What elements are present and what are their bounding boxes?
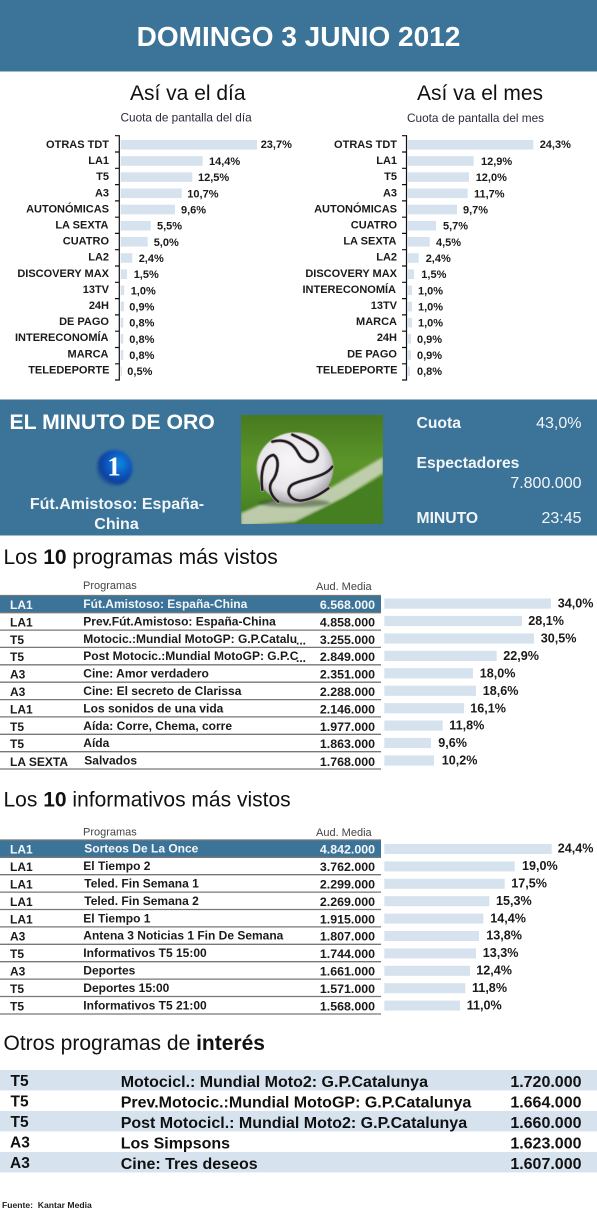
table: 10 programas más vistos: Prev.Fút.Amistoso: España-China <box>83 614 276 628</box>
table: 10 informativos más vistos: 1.744.000 <box>320 947 375 961</box>
bar chart: día: LA1 <box>88 155 109 167</box>
table column headers <box>83 826 373 839</box>
heading: otros programas: Otros programas de interés <box>4 1032 265 1055</box>
bar chart: programas: 30,5% <box>541 632 576 646</box>
bar chart: día: LA SEXTA <box>55 220 109 232</box>
bar chart: programas: 28,1% <box>528 614 564 628</box>
bar chart: programas: 11,8% <box>449 719 484 733</box>
stat: cuota: Cuota <box>416 415 461 432</box>
bar chart: día: 0,8% <box>129 318 155 330</box>
programme name: China <box>94 516 139 533</box>
bar chart: mes: 24H <box>377 332 397 344</box>
table: 10 programas más vistos: 2.146.000 <box>320 702 375 716</box>
row 1 highlighted: 6.568.000 <box>320 598 375 612</box>
table: 10 informativos más vistos: 1.661.000 <box>320 964 375 978</box>
bar chart: programas: 34,0% <box>558 597 593 611</box>
bar chart: mes: AUTONÓMICAS <box>314 202 397 215</box>
bar chart: mes: 1,0% <box>418 318 443 330</box>
bar chart: mes: CUATRO <box>351 220 397 232</box>
table: 10 informativos más vistos: LA1 <box>10 912 33 926</box>
stat: minuto <box>416 510 582 527</box>
bar chart: mes: MARCA <box>356 316 397 328</box>
bar chart: mes: OTRAS TDT <box>334 139 397 151</box>
bar chart: día: INTERECONOMÍA <box>15 331 109 344</box>
table: 10 programas más vistos: ... <box>296 634 306 648</box>
bar chart: mes: 13TV <box>371 300 398 312</box>
table column headers: Programas <box>83 826 137 838</box>
bar chart: día: 5,5% <box>157 221 182 233</box>
table: 10 programas más vistos: 4.858.000 <box>320 615 375 629</box>
bar chart: mes: 12,0% <box>476 172 507 184</box>
table: otros programas de interés <box>0 1070 597 1173</box>
table: 10 programas más vistos <box>0 580 381 769</box>
bar chart: programas: 18,0% <box>480 666 515 680</box>
row: Prev.Motocic.:Mundial MotoGP: G.P.Catalunya <box>121 1094 471 1112</box>
bar chart: mes: LA2 <box>376 252 397 264</box>
bar chart: día: 0,9% <box>129 302 155 314</box>
table: 10 programas más vistos: Salvados <box>84 754 137 768</box>
row <box>10 1073 582 1091</box>
bar chart: informativos: 11,0% <box>467 998 502 1012</box>
stat: cuota <box>416 415 582 432</box>
programme name: Fút.Amistoso: España- <box>30 496 204 513</box>
table: 10 programas más vistos: T5 <box>10 720 24 734</box>
table: 10 informativos más vistos: Teled. Fin Semana 1 <box>84 876 199 890</box>
bar chart: informativos: 14,4% <box>490 911 526 925</box>
bar chart: informativos: 13,3% <box>483 946 518 960</box>
bar chart: mes: 0,9% <box>417 334 442 346</box>
stat: espectadores <box>416 455 582 492</box>
bar chart: informativos: 17,5% <box>511 876 547 890</box>
table: 10 informativos más vistos: 1.915.000 <box>320 912 375 926</box>
row: A3 <box>10 1155 30 1172</box>
subtitle: cuota del mes: Cuota de pantalla del mes <box>407 111 544 125</box>
table: 10 informativos más vistos: Deportes <box>83 964 136 978</box>
table: 10 programas más vistos: Cine: Amor verdadero <box>83 667 209 681</box>
table: 10 programas más vistos: ... <box>296 651 306 665</box>
table: 10 informativos más vistos <box>0 826 381 1014</box>
table: 10 programas más vistos: LA1 <box>10 702 33 716</box>
bar chart: mes: 9,7% <box>463 204 488 216</box>
table: 10 programas más vistos: LA SEXTA <box>10 755 68 769</box>
bar chart: mes: 11,7% <box>474 188 505 200</box>
stat: minuto: 23:45 <box>541 510 582 527</box>
table: 10 programas más vistos: Los sonidos de una vida <box>83 701 224 715</box>
row 1 highlighted <box>10 842 375 857</box>
table: 10 informativos más vistos: 2.269.000 <box>320 895 375 909</box>
row 1 highlighted <box>10 597 375 612</box>
table: 10 informativos más vistos: 2.299.000 <box>320 878 375 892</box>
bar chart: informativos: 24,4% <box>558 842 593 856</box>
bar chart: día: 14,4% <box>209 156 240 168</box>
icon: la 1 logo: 1 <box>107 452 121 482</box>
table: 10 informativos más vistos: Informativos T5 15:00 <box>83 946 207 960</box>
bar chart: día: 23,7% <box>261 139 292 151</box>
table: 10 programas más vistos: Post Motocic.:Mundial MotoGP: G.P.C <box>83 649 299 663</box>
table: 10 programas más vistos: A3 <box>10 668 26 682</box>
table: 10 programas más vistos: 2.849.000 <box>320 650 375 664</box>
heading: el minuto de oro: EL MINUTO DE ORO <box>10 411 215 434</box>
axis month <box>402 136 406 380</box>
table: 10 informativos más vistos: 1.807.000 <box>320 930 375 944</box>
heading: así va el mes: Así va el mes <box>417 82 543 105</box>
bar chart: mes: 4,5% <box>436 237 461 249</box>
row 1 highlighted: LA1 <box>10 843 33 857</box>
row: 1.607.000 <box>510 1156 582 1173</box>
row: 1.664.000 <box>510 1094 582 1112</box>
icon: la 1 logo <box>96 450 132 486</box>
row <box>10 1094 582 1112</box>
row: Cine: Tres deseos <box>121 1156 258 1173</box>
table: 10 informativos más vistos: T5 <box>10 947 24 961</box>
table: 10 programas más vistos: 3.255.000 <box>320 633 375 647</box>
bar chart: día: CUATRO <box>63 236 109 248</box>
row: Los Simpsons <box>121 1136 230 1152</box>
table column headers: Programas <box>83 580 137 592</box>
table: 10 programas más vistos: LA1 <box>10 615 33 629</box>
table: 10 informativos más vistos: Antena 3 Noticias 1 Fin De Semana <box>83 929 284 943</box>
bar chart: día: 1,0% <box>131 285 156 297</box>
row: Motocicl.: Mundial Moto2: G.P.Catalunya <box>121 1074 428 1091</box>
header banner <box>0 0 597 72</box>
row <box>10 1155 582 1173</box>
table column headers: Aud. Media <box>316 827 373 839</box>
bar chart: día: 0,5% <box>127 366 153 378</box>
bar chart: mes: 24,3% <box>540 139 571 151</box>
bar chart: día: 12,5% <box>198 172 229 184</box>
table: 10 informativos más vistos: Teled. Fin Semana 2 <box>84 894 199 908</box>
row 1 highlighted: 4.842.000 <box>320 843 375 857</box>
bar chart: mes: INTERECONOMÍA <box>302 283 396 296</box>
bar chart: mes: DISCOVERY MAX <box>305 268 398 280</box>
panel: así va el mes <box>302 82 571 380</box>
bar chart: día: DISCOVERY MAX <box>17 268 110 280</box>
table: 10 programas más vistos: 2.351.000 <box>320 668 375 682</box>
heading: los 10 informativos: Los 10 informativos más vistos <box>4 789 291 812</box>
table: 10 informativos más vistos: El Tiempo 1 <box>83 911 151 925</box>
bar chart: día <box>15 139 292 378</box>
table: 10 programas más vistos: Cine: El secreto de Clarissa <box>83 684 242 698</box>
bar chart: día: T5 <box>96 171 109 183</box>
bar chart: mes <box>302 139 571 378</box>
table column headers <box>83 580 373 593</box>
heading: así va el día: Así va el día <box>130 82 246 105</box>
panel: así va el día <box>15 82 292 380</box>
panel: el minuto de oro <box>0 400 597 536</box>
row: 1.720.000 <box>510 1074 582 1091</box>
table: 10 programas más vistos: T5 <box>10 650 24 664</box>
title: DOMINGO 3 JUNIO 2012 <box>137 21 460 52</box>
bar chart: mes: TELEDEPORTE <box>316 364 398 376</box>
heading: los 10 programas: Los 10 programas más vistos <box>4 546 278 569</box>
row: Post Motocicl.: Mundial Moto2: G.P.Catalunya <box>121 1115 467 1132</box>
bar chart: informativos: 12,4% <box>476 964 512 978</box>
bar chart: informativos: 15,3% <box>496 894 532 908</box>
bar chart: mes: 12,9% <box>481 156 512 168</box>
table: 10 informativos más vistos: LA1 <box>10 860 33 874</box>
table: 10 programas más vistos: 1.863.000 <box>320 737 375 751</box>
table: 10 informativos más vistos: LA1 <box>10 895 33 909</box>
bar chart: programas: 22,9% <box>503 649 539 663</box>
bar chart: día: DE PAGO <box>59 316 109 328</box>
source note: Fuente: Kantar Media <box>2 1200 92 1210</box>
bar chart: día: TELEDEPORTE <box>28 364 110 376</box>
bar chart: programas: 9,6% <box>438 736 467 750</box>
bar chart: informativos <box>384 842 593 1012</box>
bar chart: programas: 10,2% <box>442 754 477 768</box>
bar chart: día: LA2 <box>88 252 109 264</box>
table: 10 informativos más vistos: Deportes 15:00 <box>83 981 170 995</box>
bar chart: día: 9,6% <box>181 204 206 216</box>
table: 10 programas más vistos: Motocic.:Mundial MotoGP: G.P.Catalu <box>83 632 297 646</box>
table: 10 programas más vistos: T5 <box>10 633 24 647</box>
table: 10 informativos más vistos: A3 <box>10 930 26 944</box>
bar chart: mes: 1,5% <box>421 269 447 281</box>
bar chart: día: 1,5% <box>134 269 159 281</box>
bar chart: mes: 1,0% <box>418 302 443 314</box>
table: 10 programas más vistos: 2.288.000 <box>320 685 375 699</box>
stat: minuto: MINUTO <box>416 510 478 527</box>
bar chart: día: 2,4% <box>139 253 164 265</box>
bar chart: día: 0,8% <box>129 350 155 362</box>
bar chart: informativos: 11,8% <box>472 981 507 995</box>
bar chart: día: 24H <box>89 300 109 312</box>
bar chart: mes: LA1 <box>376 155 397 167</box>
table: 10 programas más vistos: T5 <box>10 737 24 751</box>
bar chart: programas: 16,1% <box>470 701 506 715</box>
bar chart: mes: 0,9% <box>417 350 442 362</box>
table: 10 informativos más vistos: El Tiempo 2 <box>83 859 151 873</box>
bar chart: mes: 2,4% <box>426 253 451 265</box>
stat: espectadores: 7.800.000 <box>510 475 582 492</box>
table: 10 informativos más vistos: 1.568.000 <box>320 1000 375 1014</box>
row: 1.623.000 <box>510 1136 582 1152</box>
bar chart: día: 13TV <box>83 284 110 296</box>
bar chart: mes: DE PAGO <box>347 348 397 360</box>
bar chart: programas: 18,6% <box>483 684 518 698</box>
row: T5 <box>10 1073 29 1090</box>
bar chart: programas <box>384 597 593 768</box>
bar chart: mes: A3 <box>383 187 397 199</box>
bar chart: mes: 1,0% <box>418 285 443 297</box>
bar chart: informativos: 13,8% <box>486 929 522 943</box>
row 1 highlighted: Fút.Amistoso: España-China <box>83 597 248 611</box>
bar chart: día: 10,7% <box>187 188 219 200</box>
bar chart: mes: 0,8% <box>417 366 442 378</box>
bar chart: mes: 5,7% <box>443 221 468 233</box>
table: 10 informativos más vistos: LA1 <box>10 878 33 892</box>
table: 10 programas más vistos: 1.977.000 <box>320 720 375 734</box>
table: 10 programas más vistos: 1.768.000 <box>320 755 375 769</box>
bar chart: día: A3 <box>95 187 109 199</box>
bar chart: día: MARCA <box>68 348 109 360</box>
table: 10 informativos más vistos: 3.762.000 <box>320 860 375 874</box>
row <box>10 1114 582 1132</box>
bar chart: día: AUTONÓMICAS <box>26 202 109 215</box>
table: 10 programas más vistos: A3 <box>10 685 26 699</box>
stat: cuota: 43,0% <box>536 415 582 432</box>
row: T5 <box>10 1094 29 1110</box>
row: T5 <box>10 1114 29 1131</box>
photo: football on grass <box>241 415 383 526</box>
bar chart: día: 5,0% <box>154 237 179 249</box>
table: 10 informativos más vistos: T5 <box>10 1000 24 1014</box>
row 1 highlighted: LA1 <box>10 598 33 612</box>
row: A3 <box>10 1134 30 1152</box>
table: 10 informativos más vistos: 1.571.000 <box>320 982 375 996</box>
bar chart: día: 0,8% <box>129 334 155 346</box>
axis day <box>115 136 119 380</box>
table: 10 informativos más vistos: A3 <box>10 964 26 978</box>
table: 10 informativos más vistos: Informativos T5 21:00 <box>83 998 207 1012</box>
bar chart: mes: T5 <box>384 171 397 183</box>
table: 10 programas más vistos: Aída <box>83 736 110 750</box>
table: 10 informativos más vistos: T5 <box>10 982 24 996</box>
table column headers: Aud. Media <box>316 581 373 593</box>
row: 1.660.000 <box>510 1115 582 1132</box>
bar chart: día: OTRAS TDT <box>46 139 109 151</box>
table: 10 programas más vistos: Aída: Corre, Chema, corre <box>83 719 232 733</box>
bar chart: informativos: 19,0% <box>522 859 558 873</box>
stat: espectadores: Espectadores <box>416 455 520 472</box>
subtitle: cuota del día: Cuota de pantalla del día <box>120 110 252 124</box>
row 1 highlighted: Sorteos De La Once <box>84 842 199 856</box>
bar chart: mes: LA SEXTA <box>343 236 397 248</box>
row <box>10 1134 582 1152</box>
